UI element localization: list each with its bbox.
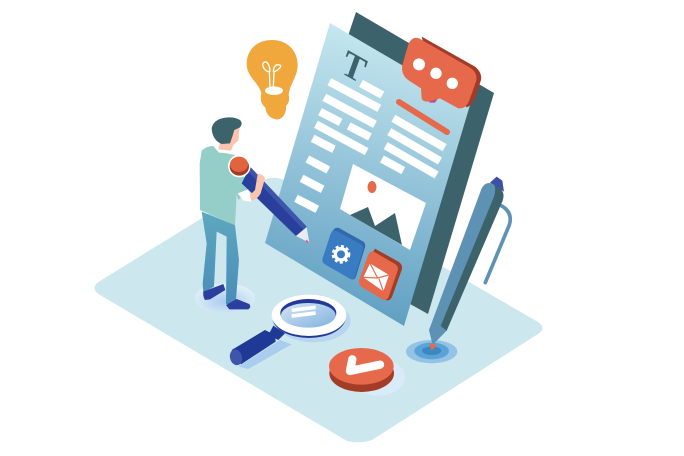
target ripple [406,340,457,363]
gear [333,246,349,262]
heading accent bar [399,102,447,132]
icon: light bulb [247,40,298,119]
platform [94,178,542,442]
pen clip [485,205,510,283]
tile: envelope icon [359,249,402,300]
speech bubble [402,37,481,108]
handle [228,326,285,367]
magnifying glass [228,295,351,369]
person [195,117,309,313]
envelope [363,263,389,291]
picture sun [368,181,376,193]
tile: gear icon [322,228,365,279]
face [218,127,240,151]
picture mountains [350,207,402,245]
shirt [200,146,250,225]
back page [335,12,494,314]
lens glare [292,307,316,316]
collar [213,146,234,153]
check button [329,348,405,396]
torso and head [200,117,250,225]
lens [281,303,336,328]
legs and shoes [195,212,255,313]
pencil [228,155,309,243]
text lines [296,82,445,209]
hair [212,117,242,144]
pen [406,177,510,363]
check mark [350,359,380,371]
picture card [340,164,426,250]
document page [265,23,470,326]
letter T: T [337,42,371,91]
hand [238,174,265,202]
